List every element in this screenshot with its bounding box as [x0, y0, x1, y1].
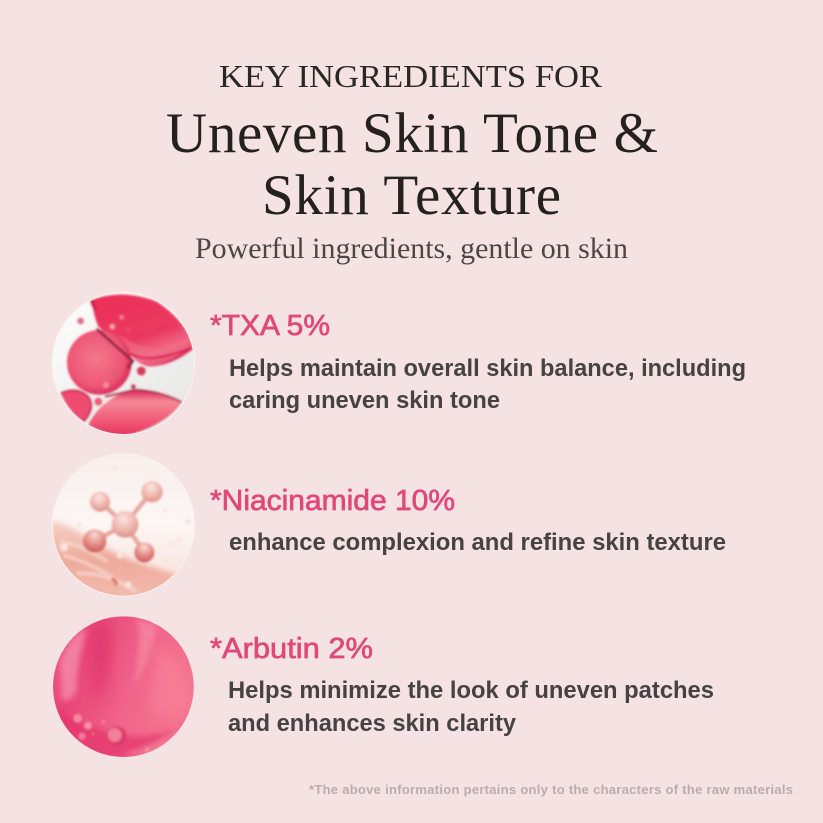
description: TXA: Helps maintain overall skin balance, including — [229, 355, 746, 382]
footnote: *The above information pertains only to the characters of the raw materials — [309, 782, 793, 797]
header — [166, 58, 658, 265]
panel: Niacinamide — [50, 452, 726, 602]
icon: molecule — [50, 452, 200, 602]
heading: TXA: *TXA 5% — [210, 310, 330, 342]
icon: red bubbles — [50, 290, 197, 437]
icon: pink serum — [50, 613, 197, 762]
description: Arbutin: and enhances skin clarity — [228, 710, 517, 737]
panel: Arbutin — [50, 613, 714, 762]
description: Niacinamide: enhance complexion and refine skin texture — [229, 529, 726, 556]
heading: Niacinamide: *Niacinamide 10% — [210, 485, 455, 517]
eyebrow heading: KEY INGREDIENTS FOR — [219, 58, 603, 94]
title line 1: Uneven Skin Tone & — [166, 102, 658, 165]
description: TXA — [229, 355, 746, 414]
heading: Arbutin: *Arbutin 2% — [210, 633, 373, 665]
description: Arbutin — [228, 677, 714, 737]
subtitle: Powerful ingredients, gentle on skin — [195, 232, 628, 265]
description: TXA: caring uneven skin tone — [229, 387, 500, 414]
title line 2: Skin Texture — [262, 164, 561, 227]
description: Arbutin: Helps minimize the look of uneven patches — [228, 677, 714, 704]
panel: TXA — [50, 290, 746, 437]
